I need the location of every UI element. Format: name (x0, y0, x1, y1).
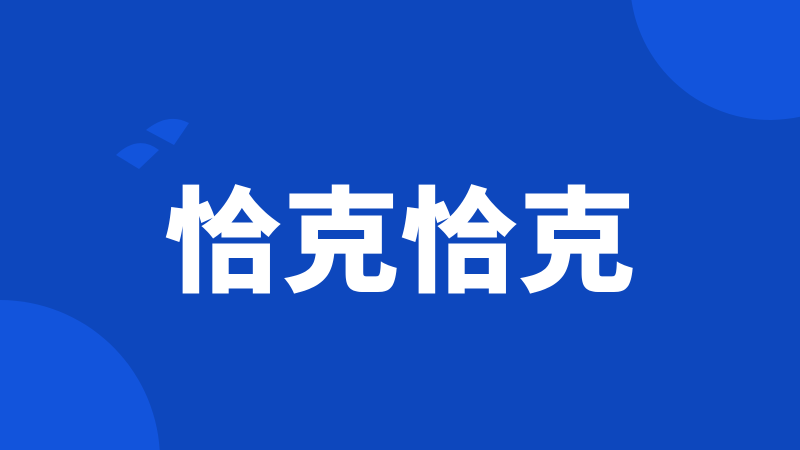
circle: top right (631, 0, 800, 120)
title: 恰克恰克 (164, 180, 636, 308)
circle: bottom left (0, 300, 160, 450)
icon: two fan-shaped logo marks (116, 119, 189, 169)
